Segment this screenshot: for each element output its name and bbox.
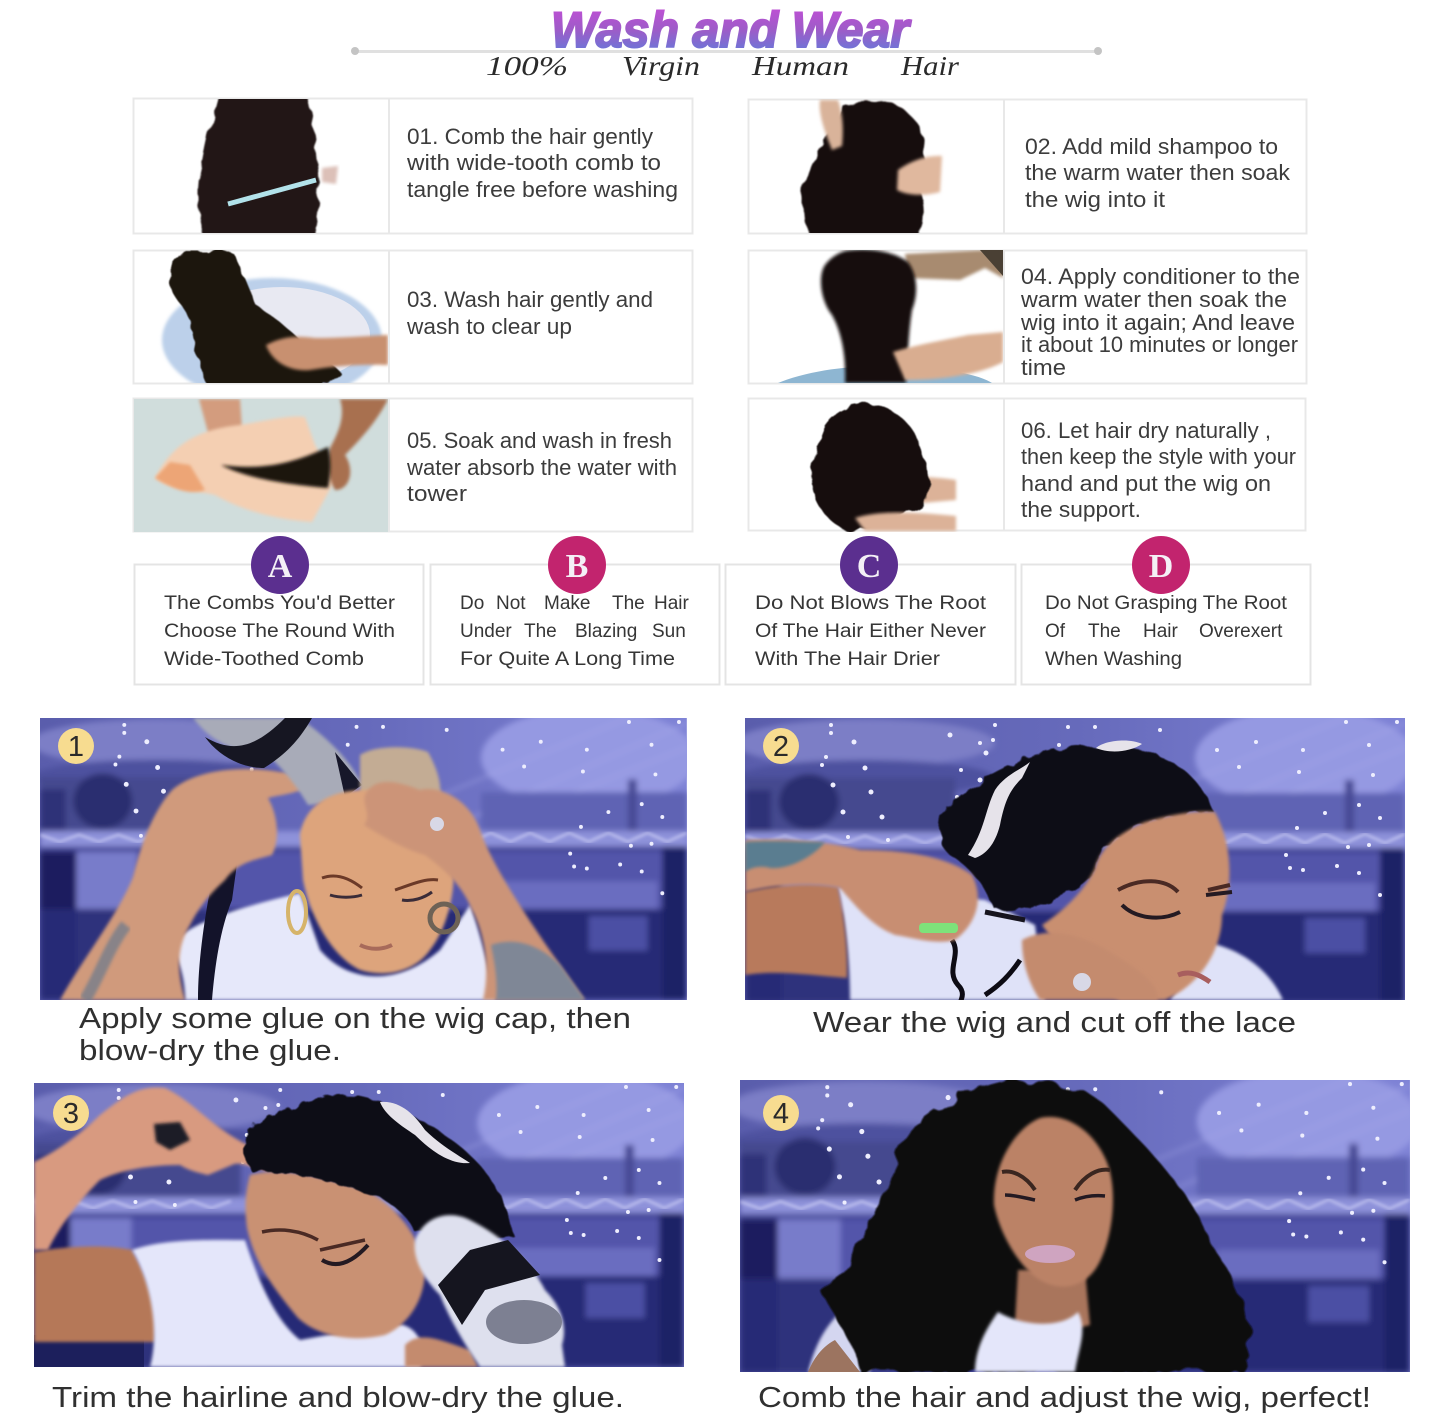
comb bbox=[154, 1122, 190, 1150]
tip B text: Hair bbox=[654, 593, 690, 614]
badge 4: 4 bbox=[773, 1098, 789, 1130]
hand under dryer bbox=[405, 1337, 478, 1367]
right hand and forearm bbox=[364, 782, 585, 1000]
step 06 text: then keep the style with your bbox=[1021, 444, 1296, 469]
eye and brow bbox=[1118, 881, 1230, 892]
caption 1 bbox=[79, 1003, 631, 1067]
upper arm bbox=[34, 1246, 156, 1342]
step 01 text bbox=[406, 124, 678, 202]
brow and eye bbox=[262, 1230, 365, 1250]
shirt left bbox=[838, 887, 1045, 1000]
step 04 text: it about 10 minutes or longer bbox=[1021, 332, 1298, 357]
step 04 text: wig into it again; And leave bbox=[1020, 310, 1295, 335]
caption 1: Apply some glue on the wig cap, then bbox=[79, 1003, 631, 1035]
head bbox=[300, 790, 454, 973]
hair bbox=[940, 746, 1214, 910]
step 04 text: warm water then soak the bbox=[1020, 287, 1287, 312]
earrings bbox=[288, 891, 306, 933]
hair mass bbox=[822, 1081, 1250, 1372]
badge D bbox=[1132, 536, 1190, 594]
lips bbox=[1025, 1245, 1075, 1263]
tip B text: Make bbox=[544, 593, 590, 614]
tip B text: The bbox=[524, 621, 557, 642]
shirt bbox=[132, 1240, 424, 1367]
lower arm bbox=[745, 885, 847, 978]
tip C text: Do Not Blows The Root bbox=[755, 593, 987, 614]
step 05 text: 05. Soak and wash in fresh bbox=[407, 428, 672, 453]
step 01 text: with wide-tooth comb to bbox=[406, 150, 661, 175]
step 01 text: tangle free before washing bbox=[407, 177, 678, 202]
neck bbox=[1015, 1270, 1090, 1335]
tip D bbox=[1022, 536, 1310, 684]
brows bbox=[1002, 1170, 1110, 1190]
photo: washing wig in basin bbox=[160, 250, 388, 383]
photo: wig drying on stand bbox=[812, 405, 956, 531]
tip A bbox=[134, 536, 424, 684]
raised arm and hand bbox=[34, 1087, 282, 1250]
step 06 text: hand and put the wig on bbox=[1021, 471, 1271, 496]
badge 3 bbox=[53, 1095, 89, 1131]
badge 1 bbox=[58, 728, 94, 764]
title: Wash and Wear: Wash and Wear bbox=[551, 2, 911, 58]
hand on cheek bbox=[1022, 933, 1158, 1000]
tip D text: Of bbox=[1045, 621, 1066, 642]
hair clip bbox=[380, 1102, 470, 1163]
caption 1: blow-dry the glue. bbox=[79, 1035, 341, 1067]
photo 3: trimming hairline bbox=[24, 1073, 694, 1368]
caption 4: Comb the hair and adjust the wig, perfect! bbox=[758, 1382, 1371, 1414]
dryer bbox=[415, 1215, 565, 1367]
step 03 text: 03. Wash hair gently and bbox=[407, 287, 653, 312]
photo: combing wig bbox=[198, 92, 338, 240]
step 02 text bbox=[1025, 134, 1291, 212]
badge A bbox=[251, 536, 309, 594]
tip B text: Blazing bbox=[575, 621, 637, 642]
tip A text: Choose The Round With bbox=[164, 621, 395, 642]
tip B text: Not bbox=[496, 593, 526, 614]
badge C bbox=[840, 536, 898, 594]
curls bbox=[952, 940, 1020, 1003]
panel: step 05 bbox=[134, 398, 692, 532]
upper arm with tattoo bbox=[745, 839, 978, 942]
shirt right bbox=[1170, 942, 1283, 1000]
photo 1: applying glue bbox=[30, 708, 697, 1000]
subtitle: Virgin bbox=[622, 51, 700, 81]
tip B text: Under bbox=[460, 621, 512, 642]
panel: step 01 bbox=[134, 92, 692, 240]
badge C: C bbox=[857, 548, 881, 585]
step 04 text: time bbox=[1021, 355, 1066, 380]
tip C text: Of The Hair Either Never bbox=[755, 621, 987, 642]
face features bbox=[322, 876, 438, 890]
eyes bbox=[1005, 1195, 1105, 1200]
clips bbox=[968, 762, 1030, 858]
tip B text: The bbox=[612, 593, 645, 614]
step 06 text: the support. bbox=[1021, 497, 1141, 522]
step 06 text bbox=[1021, 418, 1296, 522]
face bbox=[994, 1117, 1113, 1287]
subtitle bbox=[486, 51, 960, 81]
step 05 text: tower bbox=[407, 481, 467, 506]
step 05 text bbox=[406, 428, 677, 506]
step 02 text: the warm water then soak bbox=[1025, 160, 1291, 185]
tip D text: Do Not Grasping The Root bbox=[1045, 593, 1288, 614]
step 02 text: 02. Add mild shampoo to bbox=[1025, 134, 1278, 159]
left arm and hand bbox=[60, 769, 306, 1000]
panel: step 02 bbox=[748, 99, 1306, 240]
face bbox=[246, 1172, 425, 1338]
badge B bbox=[548, 536, 606, 594]
step 06 text: 06. Let hair dry naturally , bbox=[1021, 418, 1271, 443]
tip D text: Overexert bbox=[1199, 621, 1283, 642]
step 04 text bbox=[1020, 264, 1300, 380]
panel: step 03 bbox=[132, 250, 694, 384]
subtitle: Hair bbox=[900, 51, 960, 81]
shirt bbox=[975, 1312, 1082, 1372]
photo 2: cutting lace bbox=[735, 708, 1415, 1003]
tip B text: Do bbox=[460, 593, 484, 614]
tip B bbox=[430, 536, 720, 684]
title divider with end dots bbox=[351, 47, 1102, 55]
subtitle: Human bbox=[751, 51, 849, 81]
tip B text bbox=[460, 593, 690, 670]
dark lower left bbox=[34, 1335, 144, 1367]
step 03 text bbox=[406, 287, 653, 339]
photo: towel drying bbox=[134, 399, 388, 532]
cap patch bbox=[360, 747, 440, 800]
panel: step 04 bbox=[748, 250, 1306, 384]
photo: conditioner on wig bbox=[778, 250, 1003, 383]
tip A text: Wide-Toothed Comb bbox=[164, 649, 364, 670]
panel: step 06 bbox=[748, 398, 1306, 531]
badge 2 bbox=[763, 728, 799, 764]
badge A: A bbox=[268, 548, 293, 585]
tip C text: With The Hair Drier bbox=[755, 649, 941, 670]
tip C text bbox=[755, 593, 987, 670]
tip A text bbox=[164, 593, 396, 670]
hair bbox=[245, 1097, 513, 1240]
tip D text: The bbox=[1088, 621, 1121, 642]
dryer bbox=[193, 718, 362, 805]
badge B: B bbox=[566, 548, 588, 585]
tip D text: Hair bbox=[1143, 621, 1179, 642]
badge D: D bbox=[1149, 548, 1173, 585]
left arm and shirt sleeve bbox=[808, 1308, 880, 1372]
subtitle: 100% bbox=[486, 51, 568, 81]
photo: hands in wig bbox=[803, 100, 942, 240]
tip A text: The Combs You'd Better bbox=[164, 593, 396, 614]
step 02 text: the wig into it bbox=[1025, 187, 1165, 212]
badge 2: 2 bbox=[773, 731, 789, 763]
badge 3: 3 bbox=[63, 1098, 79, 1130]
face bbox=[1042, 812, 1229, 1000]
badge 1: 1 bbox=[68, 731, 84, 763]
shirt bbox=[171, 893, 496, 1000]
step 05 text: water absorb the water with bbox=[406, 455, 677, 480]
badge 4 bbox=[763, 1095, 799, 1131]
caption 3: Trim the hairline and blow-dry the glue. bbox=[52, 1382, 624, 1414]
step 04 text: 04. Apply conditioner to the bbox=[1021, 264, 1300, 289]
step 03 text: wash to clear up bbox=[406, 314, 572, 339]
tip B text: For Quite A Long Time bbox=[460, 649, 675, 670]
scissors bbox=[985, 912, 1025, 920]
tip D text: When Washing bbox=[1045, 649, 1182, 670]
tip B text: Sun bbox=[652, 621, 686, 642]
tip D text bbox=[1045, 593, 1288, 670]
wire bbox=[198, 866, 236, 1000]
tip C bbox=[726, 536, 1016, 684]
caption 2: Wear the wig and cut off the lace bbox=[813, 1007, 1296, 1039]
photo 4: finished wig bbox=[730, 1070, 1420, 1374]
step 01 text: 01. Comb the hair gently bbox=[407, 124, 653, 149]
